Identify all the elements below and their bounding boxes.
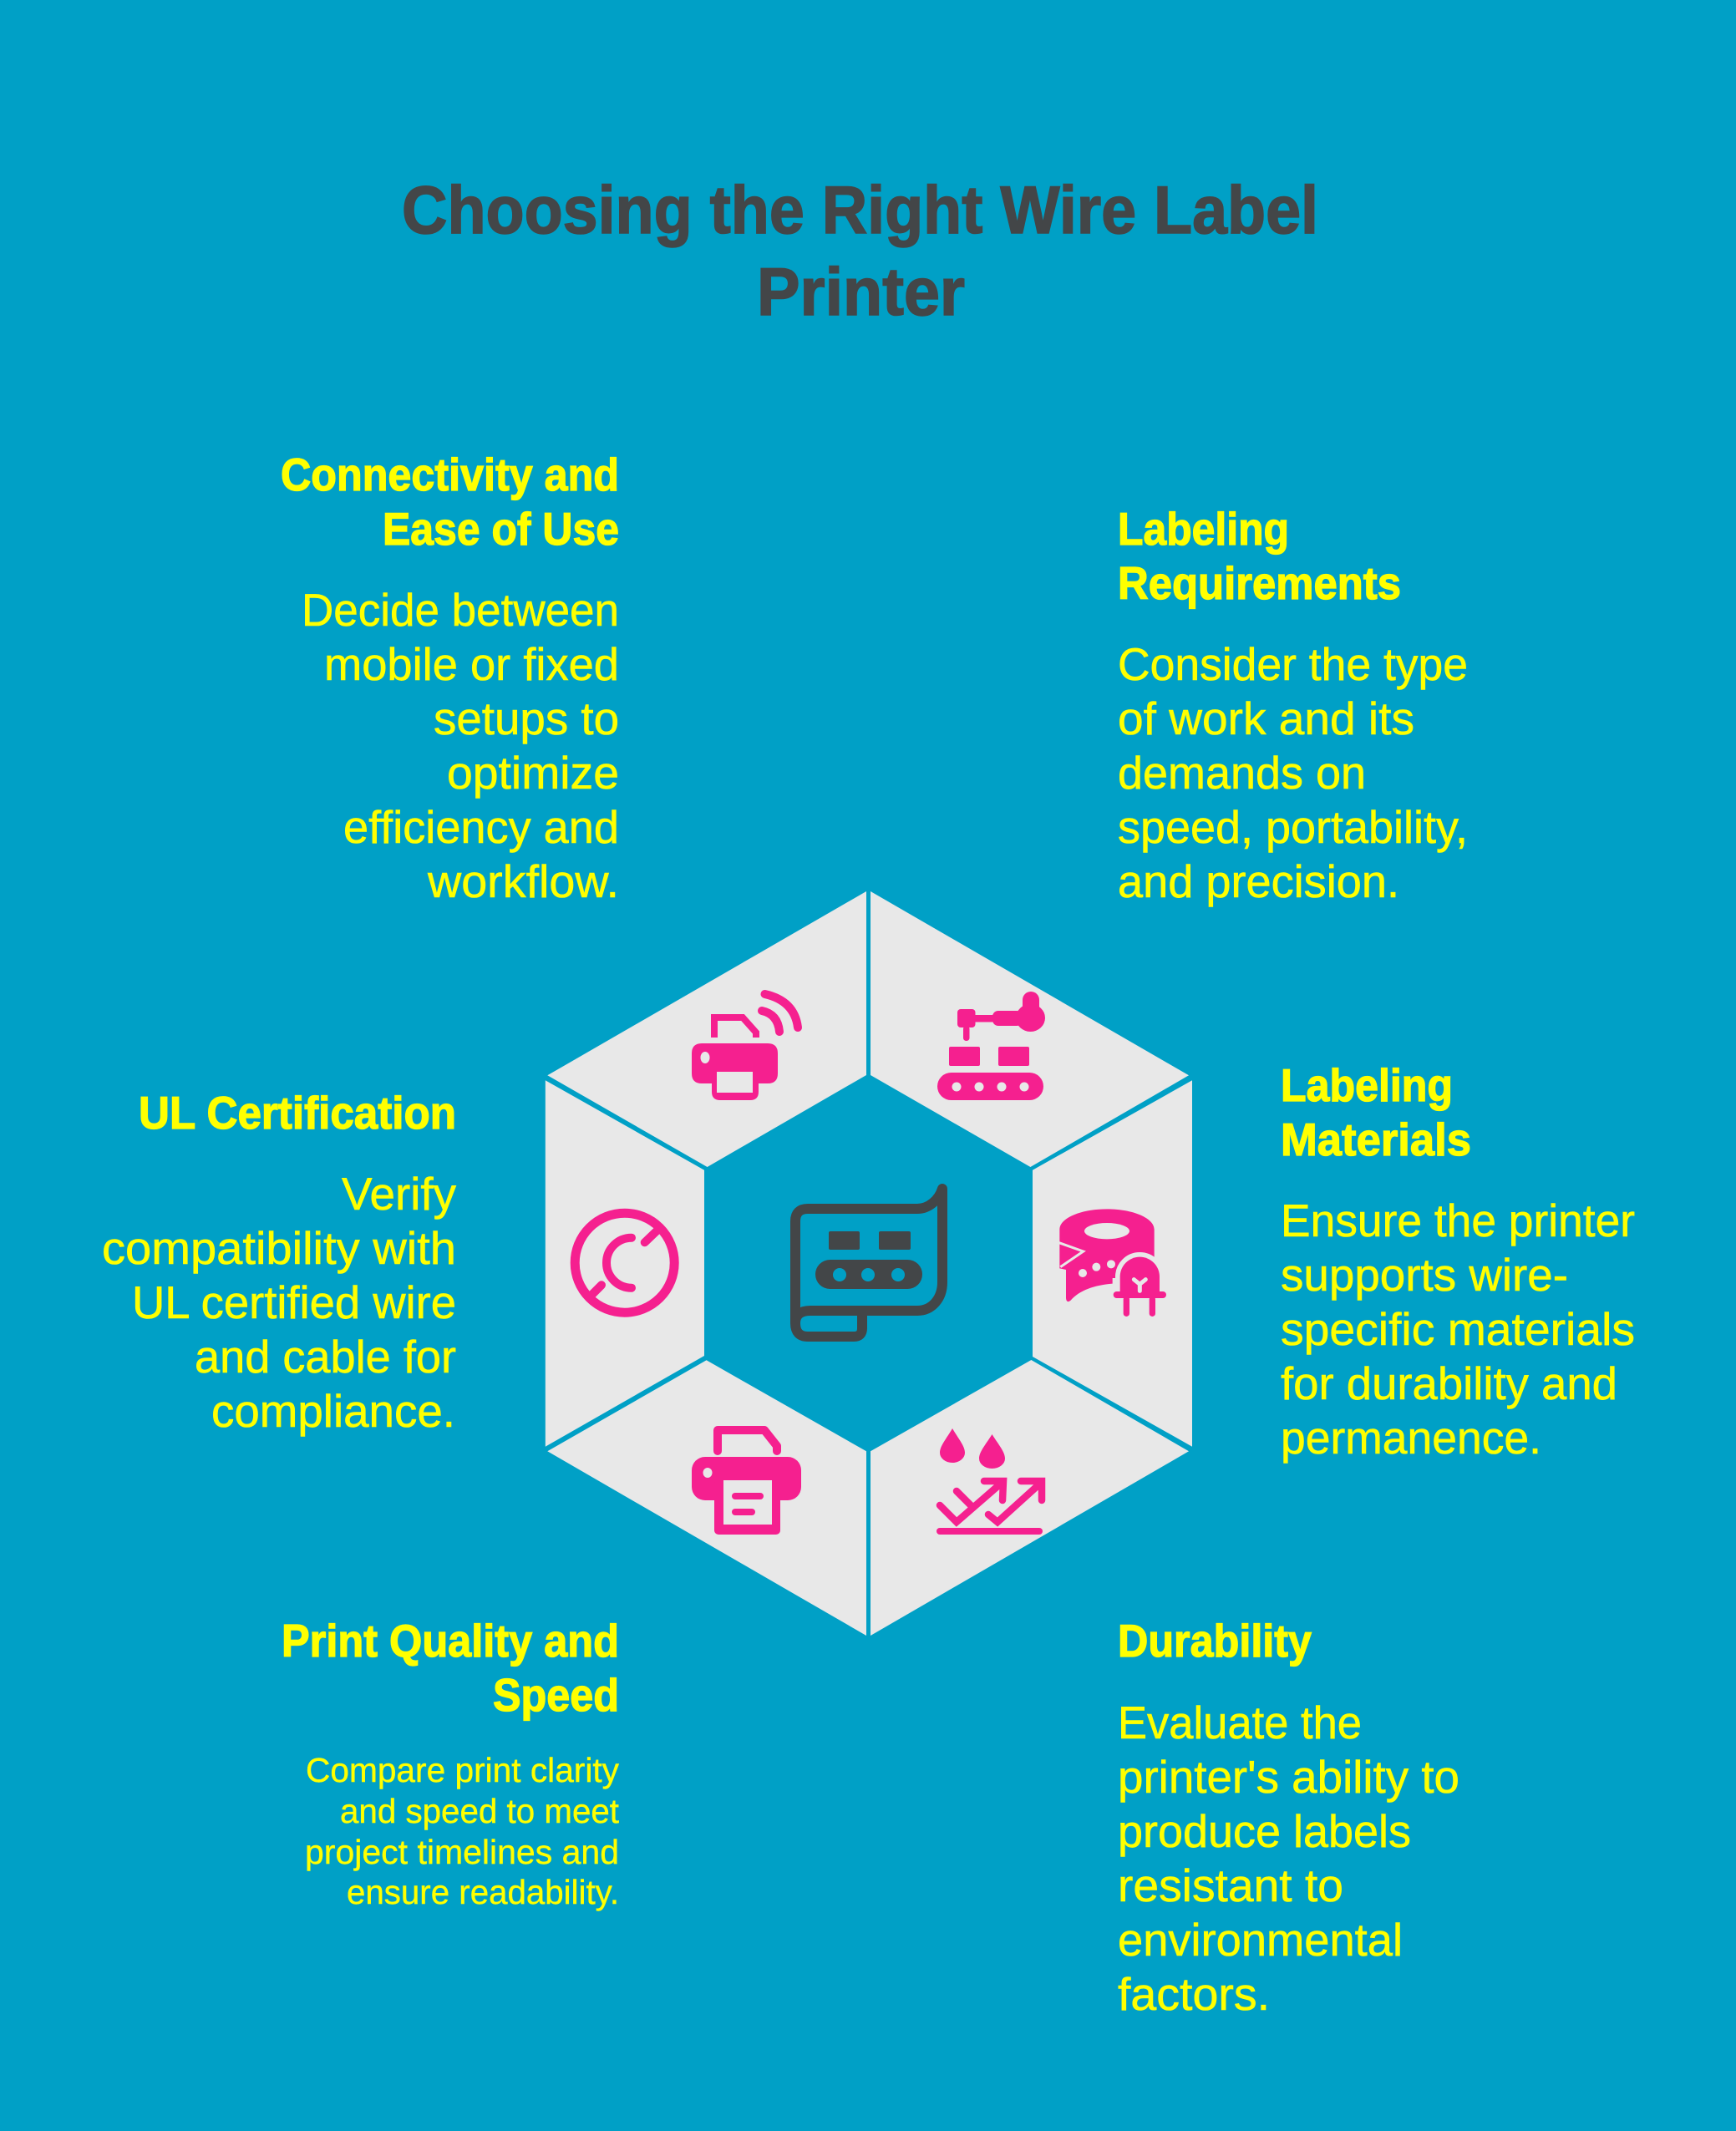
body text: Labeling Requirements: Consider the type — [1118, 638, 1468, 690]
panel: print quality segment — [547, 1360, 866, 1636]
body text: Labeling Requirements: demands on — [1118, 747, 1366, 799]
text block: Connectivity and Ease of Use — [281, 449, 619, 907]
heading: Labeling Materials: Labeling — [1281, 1059, 1453, 1111]
body text: Labeling Requirements: speed, portability, — [1118, 801, 1468, 853]
title — [402, 173, 1318, 330]
body text: Print Quality and Speed: project timelines and — [305, 1833, 619, 1871]
body text: Labeling Requirements: and precision. — [1118, 855, 1399, 907]
body text: Labeling Materials: permanence. — [1281, 1412, 1541, 1464]
body text: Labeling Materials: for durability and — [1281, 1357, 1617, 1409]
body text: Durability — [1118, 1697, 1459, 2020]
heading: UL Certification: UL Certification — [139, 1087, 456, 1139]
icon: label roll with LED — [1058, 1209, 1167, 1321]
body text: Connectivity and Ease of Use: Decide between — [302, 584, 619, 636]
body text: Print Quality and Speed: Compare print clarity — [306, 1751, 619, 1789]
body text: Print Quality and Speed: ensure readability. — [347, 1873, 619, 1911]
heading: Durability: Durability — [1118, 1615, 1312, 1667]
body text: Print Quality and Speed: and speed to meet — [340, 1792, 620, 1830]
heading: Labeling Requirements: Requirements — [1118, 557, 1401, 609]
icon: robot arm over conveyor — [937, 992, 1045, 1100]
heading: Labeling Requirements — [1118, 503, 1401, 609]
body text: Labeling Requirements: of work and its — [1118, 693, 1414, 744]
body text: Durability: factors. — [1118, 1968, 1270, 2020]
body text: Labeling Materials: specific materials — [1281, 1303, 1635, 1355]
body text: UL Certification: Verify — [342, 1168, 456, 1220]
heading: Connectivity and Ease of Use: Connectivity and — [281, 449, 619, 500]
body text: Durability: printer's ability to — [1118, 1751, 1459, 1803]
hexagon diagram — [546, 891, 1192, 1636]
body text: Labeling Requirements — [1118, 638, 1468, 907]
heading: Connectivity and Ease of Use — [281, 449, 619, 555]
heading: Connectivity and Ease of Use: Ease of Use — [383, 503, 619, 555]
body text: UL Certification: and cable for — [195, 1331, 456, 1383]
icon: wireless printer — [692, 994, 798, 1100]
body text: Print Quality and Speed — [305, 1751, 620, 1911]
heading: Labeling Requirements: Labeling — [1118, 503, 1289, 555]
body text: Durability: resistant to — [1118, 1860, 1343, 1911]
heading: Print Quality and Speed — [282, 1615, 619, 1721]
body text: UL Certification: compatibility with — [102, 1222, 456, 1274]
body text: UL Certification: UL certified wire — [132, 1276, 456, 1328]
body text: Connectivity and Ease of Use: efficiency and — [343, 801, 619, 853]
body text: UL Certification — [102, 1168, 456, 1437]
body text: Labeling Materials — [1281, 1195, 1635, 1464]
body text: Connectivity and Ease of Use: workflow. — [427, 855, 619, 907]
body text: UL Certification: compliance. — [211, 1385, 455, 1437]
text block: UL Certification — [102, 1087, 456, 1437]
text block: Print Quality and Speed — [282, 1615, 620, 1911]
body text: Connectivity and Ease of Use: setups to — [434, 693, 619, 744]
heading: Print Quality and Speed: Print Quality and — [282, 1615, 619, 1667]
heading: Labeling Materials — [1281, 1059, 1471, 1165]
icon: central label printer — [795, 1189, 942, 1337]
panel: UL certification segment — [546, 1080, 704, 1447]
body text: Durability: Evaluate the — [1118, 1697, 1362, 1748]
heading: Print Quality and Speed: Speed — [493, 1669, 619, 1721]
body text: Connectivity and Ease of Use: mobile or fixed — [324, 638, 619, 690]
icon: water drops and rising arrows — [937, 1428, 1043, 1535]
panel: durability segment — [871, 1360, 1189, 1636]
body text: Connectivity and Ease of Use: optimize — [447, 747, 619, 799]
panel: connectivity segment — [547, 891, 866, 1167]
body text: Connectivity and Ease of Use — [302, 584, 619, 907]
title: Printer — [757, 255, 965, 330]
body text: Labeling Materials: supports wire- — [1281, 1249, 1568, 1301]
icon: circled C certification mark — [575, 1213, 674, 1312]
heading: Labeling Materials: Materials — [1281, 1114, 1471, 1165]
body text: Durability: produce labels — [1118, 1805, 1411, 1857]
icon: document printer — [692, 1430, 801, 1535]
panel: labeling requirements segment — [871, 891, 1189, 1167]
text block: Durability — [1118, 1615, 1459, 2020]
text block: Labeling Materials — [1281, 1059, 1635, 1464]
title: Choosing the Right Wire Label — [402, 173, 1318, 248]
body text: Labeling Materials: Ensure the printer — [1281, 1195, 1635, 1246]
text block: Labeling Requirements — [1118, 503, 1468, 907]
panel: labeling materials segment — [1033, 1080, 1192, 1447]
body text: Durability: environmental — [1118, 1914, 1403, 1966]
